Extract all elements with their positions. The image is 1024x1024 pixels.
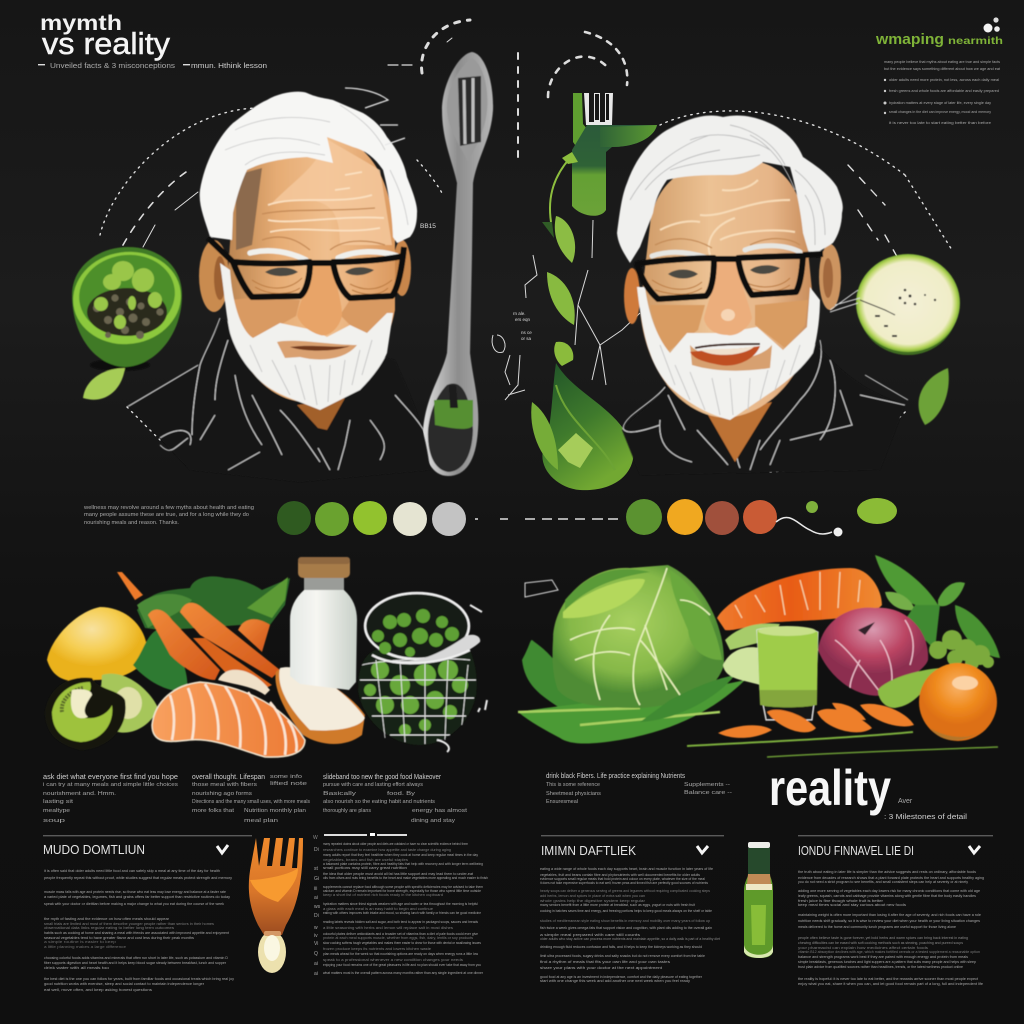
panel: myth details column: vegetables, beans and fish are useful staples: [323, 857, 408, 862]
panel: myth details column: what matters most is the overall pattern across many months rather than any single ingredient at one dinner: [323, 970, 484, 975]
text block: myth note 1: lasting sit: [43, 799, 74, 805]
beard strands: [660, 345, 800, 415]
panel: reality list two: nutrition needs shift gradually, so it is wise to review your diet when your health or your living situation changes: [798, 918, 980, 923]
nose: [297, 262, 342, 336]
text block: reality note: Ensuresmeal: [546, 799, 578, 805]
heading: IONDU FINNAVEL LIE DI: [798, 844, 914, 858]
panel: myth details column: Di: [314, 847, 319, 853]
broccoli: [929, 630, 994, 670]
panel: reality daily list: whole grains help the digestive system keep regular: [540, 898, 646, 903]
text block: reality note: Supplements --: [684, 782, 730, 788]
icon: orange fork: [249, 838, 303, 973]
top right heading with notes: but the evidence says something different about how we age and eat: [884, 66, 1001, 71]
panel: reality list two: the truth about eating in later life is simpler than the advice suggests and rests on ordinary, affordable foods: [798, 869, 976, 874]
panel: myth details column: [313, 833, 488, 977]
fold of fish: [218, 670, 270, 695]
top right heading with notes: hydration matters at every stage of later life, every single day: [889, 100, 991, 105]
heading: reality: : 3 Milestones of detail: [884, 814, 968, 821]
icon: check: [969, 846, 980, 853]
lens wrinkles: [252, 278, 392, 294]
panel: myth details column: Q: [314, 951, 318, 957]
panel: myth daily list: good nutrition works with exercise, sleep and social contact to maintain independence longer: [44, 981, 205, 986]
face: [226, 135, 395, 402]
panel: myth details column: slow cooking softens tough vegetables and makes them easier to chew for those with dental or swallowing issues: [323, 940, 481, 945]
panel: myth details column: a glass with each meal is an easy habit to begin and continue: [323, 906, 434, 911]
panel: reality list two: leafy greens, squash, carrots and cabbage provide vitamins along with gentle fibre that the body easily handles: [798, 893, 976, 898]
stalks: [518, 680, 745, 744]
panel: reality daily list: studies of mediterranean style eating show benefits in memory and mobility over many years of follow up: [540, 918, 711, 923]
panel: myth details column: oils from olives and nuts bring benefits to the heart and make vegetables more appealing and much easier to finish: [323, 875, 488, 880]
jacket: [127, 318, 430, 482]
panel: reality daily list: cooking in batches saves time and energy, and freezing portions helps to keep good meals always on the shelf or table: [540, 908, 713, 913]
panel: myth details column: iii: [314, 886, 317, 892]
panel: myth daily list: fiber supports digestion and heart health and it helps keep blood sugar steady between breakfast, lunch and supper: [44, 960, 227, 965]
panel: myth details column: small portions may still carry great nutrition: [323, 865, 407, 870]
small caption left: nourishing meals and reason. Thanks.: [84, 520, 179, 526]
pale vegetables: [725, 623, 780, 650]
small carrots: [718, 703, 914, 738]
panel: myth daily list: a simple routine is easier to keep: [44, 939, 117, 944]
panel: reality daily list: find a rhythm of meals that fits your own life and your own tastes: [540, 959, 670, 964]
top right heading with notes: nearmith: [948, 36, 1003, 47]
panel: myth daily list: drink water with all meals too: [44, 965, 110, 970]
text block: myth note 3: energy has almost: [412, 808, 468, 814]
panel: myth details column: Vi: [314, 941, 318, 947]
large leaf: [542, 363, 634, 490]
lower cheek shading: [650, 300, 808, 355]
text block: myth note 3: [323, 774, 468, 824]
line doodles beside the vine: ns ce: [521, 330, 532, 335]
icon: bowl of green seeds: [67, 245, 187, 400]
small sketch: [525, 580, 558, 597]
orange: [919, 663, 997, 741]
hair: [200, 92, 417, 243]
text block: myth note 2: overall thought. Lifespan: [192, 774, 265, 781]
title block: mymth: [40, 12, 122, 35]
panel: reality daily list: vegetables, fruit and beans contain fibre and phytonutrients with well documented benefits for older adults: [540, 872, 700, 877]
panel: myth details column: a balanced plate contains protein, fibre and healthy fats that help with recovery and with longer term wellbeing: [323, 861, 483, 866]
top right heading with notes: small changes in the diet can improve energy, mood and memory: [889, 109, 991, 114]
panel: myth details column: the idea that older people must avoid all fat has little support and may lead them to under-eat: [323, 871, 474, 876]
panel: reality list two: balance and strength programs work best if they are paired with enough energy and protein from meals: [798, 954, 968, 959]
panel: myth details column: speak to a professional whenever a new condition changes your needs: [323, 957, 463, 962]
text block: myth note 2: [192, 774, 310, 824]
panel: myth details column: Di: [314, 913, 319, 919]
panel: reality list two: evidence from decades of research shows that a plant forward plate protects the heart and supports healthy aging: [798, 875, 984, 880]
text block: myth note 3: slideband too new the good food Makeover: [323, 774, 442, 781]
title block: Unveiled facts & 3 misconceptions: [50, 63, 176, 70]
small caption left: [84, 505, 254, 526]
text block: reality note: drink black Fibers. Life practice explaining Nutrients: [546, 773, 685, 780]
panel: reality list two: simple breakfasts, generous lunches and light suppers are a pattern that suits many people and helps with sleep: [798, 959, 977, 964]
panel: myth daily list: the myth of fasting and the evidence on how often meals should appear: [44, 916, 170, 921]
top right heading with notes: wmaping: [875, 31, 944, 48]
panel: myth daily list: small trials are limited and most of them describe younger people rather than seniors in their homes: [44, 921, 214, 926]
panel: myth daily list: [43, 835, 252, 992]
text block: reality note: Sheetmeat physicians: [546, 791, 602, 797]
text block: myth note 3: Basically: [323, 791, 357, 797]
panel: reality list two: keep meal times social and stay curious about new foods: [798, 902, 906, 907]
forehead highlight: [270, 138, 392, 245]
panel: myth daily list: a varied plate of vegetables, legumes, fish and grains offers far better support than restrictive routines do today: [44, 894, 230, 899]
red onion: [818, 608, 928, 696]
nose: [704, 262, 752, 335]
panel: reality daily list: it does not take expensive superfoods to eat well; frozen peas and tinned fish are perfectly good sources of nutrients: [540, 880, 708, 885]
title block: vs reality: [42, 26, 171, 61]
panel: myth daily list: eat well, move often, and keep asking honest questions: [44, 987, 152, 992]
top right heading with notes: [875, 17, 1003, 125]
text block: myth note 1: i can try at many meals and simple little choices: [43, 782, 179, 788]
panel: myth details column: keep a short list of nutrient rich foods ready in the kitchen cupboard: [323, 892, 443, 897]
heading: reality: Aver: [898, 798, 913, 805]
panel: reality list two: vitamin B12 absorption declines with age, which makes fortified cereals or a tested supplement a reasonable option: [798, 949, 980, 954]
panel: myth daily list: people frequently repeat this without proof, while studies suggest that regular meals protect strength and memory: [44, 875, 232, 880]
panel: myth details column: supplements cannot replace food although some people with specific deficiencies may be advised to take them: [323, 884, 484, 889]
panel: reality list two: chewing difficulties can be eased with soft cooking methods such as stewing, poaching and pureed soups: [798, 940, 963, 945]
kiwi: [45, 674, 158, 750]
beard: [220, 263, 393, 410]
glasses: [637, 254, 823, 299]
panel: myth daily list: muscle mass falls with age and protein needs rise, so those who eat less may lose energy and balance at a faster rate: [44, 889, 227, 894]
panel: myth daily list: it is often said that older adults need little food and can safely skip a meal at any time of the day for health: [44, 868, 220, 873]
heading: IMIMN DAFTLIEK: [541, 844, 637, 858]
leaf: [83, 368, 125, 400]
panel: myth details column: researchers continue to examine how appetite and taste change during aging: [323, 847, 451, 852]
icon: green bottle: [744, 842, 773, 958]
icon: check: [217, 845, 228, 853]
cucumber: [878, 668, 940, 708]
text block: myth note 2: Nutrition monthly plan: [244, 808, 306, 814]
food group: reality foods: [518, 555, 1000, 757]
panel: myth details column: ai: [314, 895, 318, 901]
jacket: [622, 340, 908, 475]
leaves: [555, 216, 575, 263]
milk bottle: [290, 557, 357, 690]
text block: reality note: This is some reference: [546, 782, 600, 788]
panel: myth details column: Gi: [314, 876, 319, 882]
top right heading with notes: fresh greens and whole foods are affordable and easily prepared: [889, 88, 999, 93]
under mouth skin: [690, 345, 772, 371]
salmon: [152, 682, 305, 757]
panel: reality list two: people often believe taste is gone forever, yet bold herbs and warm spices can bring back interest in eating: [798, 935, 968, 940]
eyebrows: [250, 251, 397, 260]
wire bowl of peas: [358, 593, 487, 752]
panel: reality list two: the reality is hopeful: it is never too late to eat better, and the rewards arrive sooner than most people expect: [798, 976, 979, 981]
cabbage: [553, 565, 724, 708]
text block: myth note 1: mealtype: [43, 808, 70, 814]
icon: green fork and vine: [531, 93, 657, 490]
fork tines: [584, 93, 613, 125]
text block: myth note 2: lifted note: [270, 781, 307, 787]
vine: [550, 158, 570, 222]
text block: myth note 2: meal plan: [244, 818, 278, 824]
title block: mmun. Hthink lesson: [191, 63, 267, 70]
panel: myth details column: many repeated claims about older people and diets are outdated or have no clear scientific evidence behind them: [323, 841, 468, 846]
large carrot: [717, 568, 882, 630]
leafy greens: [875, 555, 938, 607]
line doodles beside the vine: or sa: [521, 336, 532, 341]
glasses: [208, 238, 404, 298]
panel: reality daily list: drinking enough fluid reduces confusion and falls, and it helps to keep the kidneys working as they should: [540, 944, 702, 949]
top right heading with notes: older adults need more protein, not less, across each daily meal: [889, 77, 999, 82]
panel: reality daily list: good food at any age is an investment in independence, comfort and the daily pleasure of eating together: [540, 974, 703, 979]
portrait: reality man: [617, 115, 908, 475]
heading: reality: [769, 760, 968, 821]
panel: myth details column: calcium and vitamin D remain important for bone strength, especially for those who spend little time outside: [323, 888, 482, 893]
panel: myth details column: reading labels reveals hidden salt and sugar, and both tend to appear in packaged soups, sauces and breads: [323, 919, 478, 924]
heading: reality: reality: [769, 760, 891, 816]
neck: [708, 402, 772, 462]
forehead shadow: [236, 168, 262, 250]
text block: myth note 3: dining and stay: [411, 818, 456, 824]
panel: reality daily list: older adults who stay active can process more nutrients and maintain appetite, so a daily walk is part of a healthy diet: [540, 936, 721, 941]
forehead lines: [660, 180, 795, 255]
panel: myth details column: colourful plates deliver antioxidants and a broader set of vitamins than a diet of pale foods could ever give: [323, 931, 479, 936]
text block: myth note 2: nourishing ago forms: [192, 791, 253, 797]
panel: myth details column: enjoying your food remains one of the great pleasures in life and no plan should ever take that away from you: [323, 962, 481, 967]
icon: spoon: [423, 52, 493, 476]
text block: myth note 2: Directions and the many small uses, with more meals: [192, 799, 310, 805]
mustache and mouth: [690, 346, 760, 366]
panel: myth details column: ws: [314, 904, 321, 910]
lemon: [47, 607, 147, 681]
ears: [624, 244, 841, 324]
panel: myth daily list: a little planning makes a large difference: [44, 944, 127, 949]
panel: myth details column: plan meals ahead for the week so that nourishing options are ready on days when energy runs a little low: [323, 951, 478, 956]
panel: myth daily list: speak with your doctor or dietitian before making a major change to what you eat during the course of the week: [44, 901, 224, 906]
eyes: [265, 267, 374, 276]
panel: reality daily list: limit ultra processed foods, sugary drinks and salty snacks but do not remove every comfort from the table: [540, 953, 706, 958]
eyes: [668, 265, 780, 278]
panel: myth details column: ai: [314, 961, 318, 967]
bread: [275, 667, 365, 744]
text block: reality note: [546, 773, 732, 805]
text block: myth note 3: thoroughly are plans: [323, 808, 372, 814]
heading: MUDO DOMTLIUN: [43, 843, 145, 857]
neck: [297, 398, 345, 430]
panel: reality list two: enjoy what you eat, share it when you can, and let good food remain part of a long, full and independent life: [798, 981, 984, 986]
top right heading with notes: it is never too late to start eating better than before: [889, 120, 992, 125]
panel: myth details column: a little seasoning with herbs and lemon will replace salt in most dishes: [323, 925, 453, 930]
panel: reality daily list: fish twice a week gives omega fats that support vision and cognition, with plant oils adding to the overall gain: [540, 925, 712, 930]
lens wrinkles: [652, 278, 790, 294]
text block: myth note 3: pursue with care and lasting effort always: [323, 782, 424, 788]
panel: myth daily list: observational data links regular eating to better long term outcomes: [44, 925, 174, 930]
small caption left: wellness may revolve around a few myths about health and eating: [84, 505, 254, 511]
ears: [199, 240, 411, 312]
beard strands: [250, 340, 372, 405]
title block: [38, 12, 267, 70]
panel: reality list two: maintaining weight is often more important than losing it after the age of seventy, and rich foods can have a role: [798, 912, 982, 917]
lower cheek shading: [230, 298, 395, 340]
herbs: [137, 576, 290, 630]
panel: reality list two: [798, 835, 993, 986]
panel: myth daily list: the best diet is the one you can follow for years, built from familiar foods and occasional treats which bring real joy: [44, 976, 234, 981]
panel: reality daily list: a simple meal prepared with care still counts: [540, 932, 640, 937]
panel: myth daily list: choosing colorful foods adds vitamins and minerals that often run short in later life, such as potassium and vitamin D: [44, 955, 228, 960]
panel: myth daily list: habits such as cooking at home and sharing a meal with friends are associated with improved appetite and enjoyment: [44, 930, 230, 935]
line doodles beside the vine: BB15: [420, 223, 436, 230]
colour palette row: [277, 498, 897, 536]
beard: [637, 287, 820, 420]
text block: myth note 3: food. By: [387, 791, 416, 797]
panel: reality daily list: many seniors benefit from a little more protein at breakfast, such as eggs, yogurt or nuts with fresh fruit: [540, 902, 696, 907]
panel: myth details column: st: [314, 866, 318, 872]
panel: reality list two: you do not need a strict program to see benefits, and small consistent steps can help at seventy or at ninety: [798, 879, 968, 884]
text block: myth note 3: also nourish so the eating habit and nutrients: [323, 799, 436, 805]
panel: reality list two: fresh juice is fine though whole fruit is better: [798, 898, 884, 903]
panel: myth details column: iv: [314, 933, 318, 939]
panel: reality daily list: share your plans with your doctor at the next appointment: [540, 965, 663, 970]
panel: reality daily list: [540, 835, 724, 983]
panel: reality daily list: eating a wide range of whole foods each day supports heart, brain and muscle function in later years of life: [540, 866, 714, 871]
carrots: [117, 572, 280, 690]
panel: reality list two: trust plain advice from qualified sources rather than headlines, trends, or the latest wellness product online: [798, 964, 964, 969]
panel: myth details column: hydration matters since thirst signals weaken with age and water or tea throughout the morning is helpful: [323, 901, 478, 906]
panel: reality list two: your pharmacist can explain how medicines affect certain foods: [798, 945, 928, 950]
line doodles beside the vine: ers eqn: [515, 317, 531, 322]
panel: myth details column: W: [313, 835, 318, 841]
leaf: [919, 368, 949, 425]
panel: reality list two: meals delivered to the home and community lunch programs are useful support for those living alone: [798, 924, 957, 929]
text block: myth note 1: [43, 774, 179, 824]
panel: myth details column: ai: [314, 971, 318, 977]
panel: reality list two: adding one more serving of vegetables each day lowers risk for many chronic conditions that come with old age: [798, 888, 981, 893]
top right heading with notes: many people believe that myths about eating are true and simple facts: [884, 59, 1000, 64]
greens left: [522, 640, 587, 708]
panel: reality daily list: evidence supports small regular meals that hold protein and colour on every plate, whatever the size of the meal: [540, 876, 705, 881]
eyebrows: [652, 246, 800, 258]
forehead wrinkles: [268, 172, 384, 232]
hair: [617, 115, 843, 263]
panel: reality daily list: add herbs, lemon and spices in place of extra salt when you can: [540, 893, 645, 898]
text block: myth note 2: more folks that: [192, 808, 235, 814]
panel: myth details column: frozen produce keeps its nutrients and lowers kitchen waste: [323, 946, 432, 951]
text block: myth note 1: soup: [43, 818, 65, 824]
portrait: myth man: [127, 88, 430, 482]
mouth: [277, 341, 357, 359]
text block: myth note 1: ask diet what everyone first find you hope: [43, 774, 178, 781]
panel: myth details column: many adults report that they feel healthier when they cook at home and keep regular meal times in the day: [323, 852, 478, 857]
panel: myth details column: protein at each meal supports muscle, whether from eggs, fish, dairy, lentils or soy products: [323, 935, 473, 940]
icon: melon slice: [830, 254, 960, 425]
food group: myth foods: [45, 557, 487, 757]
face: [640, 160, 815, 418]
panel: myth daily list: seasonal vegetables tend to have greater flavor and cost less during their peak months: [44, 935, 194, 940]
icon: check: [697, 846, 708, 853]
panel: reality daily list: start with one change this week and add another one next week when you feel ready: [540, 978, 690, 983]
text block: reality note: Balance care --: [684, 790, 732, 796]
text block: myth note 2: some info: [270, 774, 302, 780]
text block: myth note 1: nourishment and. Hmm.: [43, 791, 116, 797]
panel: myth details column: w: [314, 925, 318, 931]
text block: myth note 2: those meal with fibers: [192, 782, 258, 788]
panel: reality daily list: hearty soups can deliver a generous serving of greens and legumes without requiring complicated cooking steps: [540, 888, 710, 893]
small caption left: many people assume these are true, and for a long while they do: [84, 512, 249, 518]
line doodles beside the vine: [420, 220, 640, 400]
green juice glass: [757, 626, 818, 720]
line doodles beside the vine: rn ale.: [513, 311, 526, 316]
dotted decorative arcs: [100, 20, 952, 474]
panel: myth details column: eating with others improves both intake and mood, so sharing lunch with family or friends can be good medicine: [323, 910, 482, 915]
